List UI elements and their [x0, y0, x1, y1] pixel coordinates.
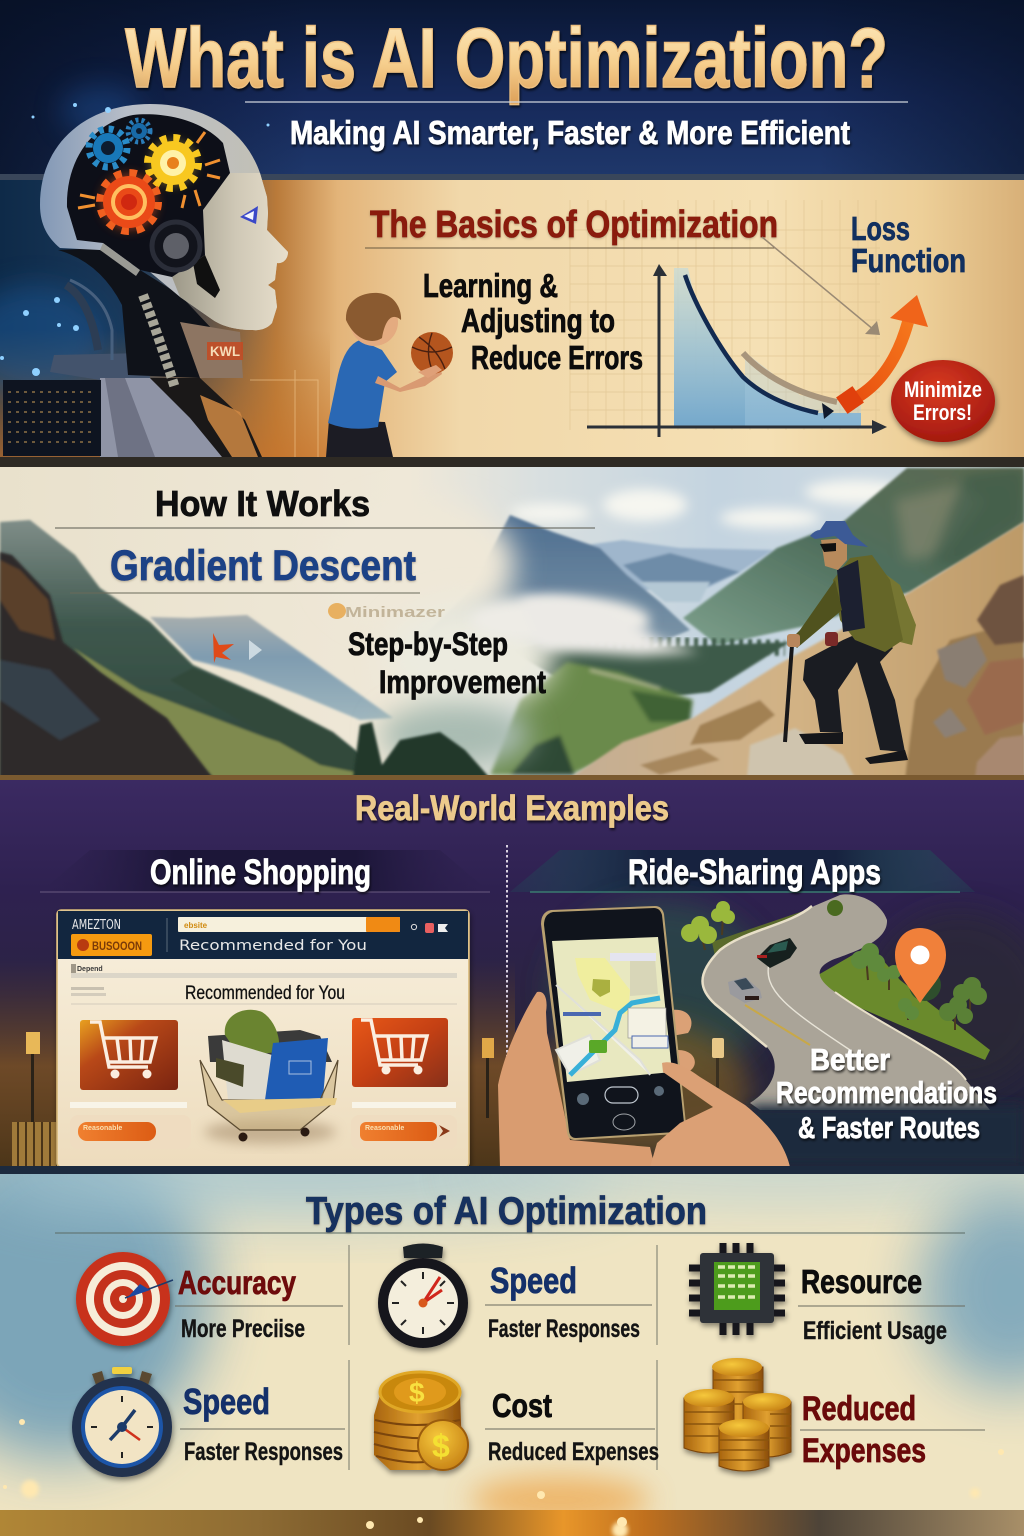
walking stick	[785, 645, 792, 742]
eye	[240, 206, 258, 224]
caption: better routes	[776, 1042, 997, 1145]
rocks	[747, 575, 1024, 778]
gear: yellow	[148, 138, 198, 188]
backpack	[880, 570, 916, 645]
badge: minimize errors: Minimize	[904, 377, 982, 402]
badge: minimize errors	[891, 360, 995, 442]
text: learning	[423, 267, 643, 376]
gear: blue small	[128, 120, 150, 142]
lamp	[712, 1038, 724, 1058]
illustration: child with ball	[326, 293, 453, 457]
valley mist	[385, 600, 555, 710]
trousers	[803, 628, 905, 752]
item: cost: Cost	[492, 1387, 552, 1424]
road	[702, 894, 990, 1110]
map screen	[552, 937, 672, 1082]
ridge fade	[440, 516, 534, 622]
caption smudge: Minimazer	[345, 604, 445, 621]
item: speed top: Speed	[490, 1260, 577, 1301]
page header: AMEZTON	[72, 918, 121, 933]
car: dark	[757, 938, 797, 968]
item: speed top	[378, 1244, 652, 1348]
caption: better routes: Better	[810, 1042, 890, 1077]
head	[821, 538, 847, 570]
item: reduced expenses	[684, 1358, 985, 1471]
grass	[818, 945, 990, 1060]
icon: map pin	[895, 928, 946, 1003]
text: learning: Reduce Errors	[471, 339, 643, 376]
text: step by step	[348, 626, 546, 700]
cheek panel	[193, 255, 220, 298]
item: speed top: Faster Responses	[488, 1315, 640, 1343]
jacket	[833, 555, 903, 652]
item: speed bottom: Speed	[183, 1381, 270, 1422]
shopping basket	[200, 1010, 338, 1144]
icon: chip	[689, 1243, 785, 1335]
badge: minimize errors: Errors!	[913, 400, 972, 425]
panel: the basics of optimization	[0, 85, 1024, 459]
ear ring	[152, 222, 200, 270]
data points	[0, 103, 270, 376]
ribbon: ride sharing apps	[510, 850, 975, 892]
icon: coin stack: $	[409, 1377, 425, 1408]
icon: coin piles	[684, 1358, 791, 1471]
tree line	[510, 640, 790, 700]
panel: real-world examples	[0, 780, 1024, 1172]
sparks	[78, 132, 220, 208]
boots	[799, 732, 908, 764]
left hand	[498, 992, 655, 1168]
hiker	[785, 521, 916, 764]
heading: gradient descent: Gradient Descent	[110, 542, 416, 590]
item: reduced expenses: Reduced	[802, 1390, 916, 1428]
caption smudge	[328, 603, 445, 621]
distant mountains	[472, 467, 1024, 646]
page header: BUSOOON	[92, 939, 142, 953]
label: loss function: Loss	[851, 210, 910, 247]
text: learning: Adjusting to	[461, 302, 615, 339]
trees	[681, 900, 987, 1030]
item: accuracy: More Preciise	[181, 1315, 305, 1343]
icon: target	[76, 1252, 173, 1346]
text: learning: Learning &	[423, 267, 558, 304]
ribbon: online shopping: Online Shopping	[150, 853, 371, 892]
panel: how it works	[0, 457, 1024, 781]
face	[172, 173, 288, 330]
server building	[3, 380, 101, 456]
item: accuracy: Accuracy	[178, 1264, 297, 1301]
clouds	[510, 480, 905, 528]
chart: loss curve	[587, 237, 928, 437]
street lamps	[12, 1032, 494, 1168]
ribbon: online shopping	[40, 850, 490, 892]
product row left	[70, 1102, 191, 1149]
ride sharing scene	[498, 894, 1024, 1168]
shade under caption	[750, 1105, 1024, 1166]
subtitle: Making AI Smarter, Faster & More Efficient	[290, 114, 850, 151]
item: resource	[689, 1243, 965, 1345]
dark rock	[0, 552, 213, 778]
text: step by step: Improvement	[379, 664, 546, 700]
panel: header	[0, 0, 1024, 180]
gear: orange	[100, 173, 158, 231]
car: silver	[728, 977, 762, 1003]
icon: robot head with gears	[40, 85, 288, 457]
heading: The Basics of Optimization	[370, 204, 778, 246]
panel: types of AI optimization	[0, 1166, 1024, 1536]
page header: Recommended for You	[179, 938, 367, 954]
icon: coin stack	[374, 1372, 468, 1470]
heading: Real-World Examples	[355, 789, 669, 828]
product row left: Reasonable	[83, 1125, 122, 1132]
pointer line	[762, 237, 874, 330]
label: loss function: Function	[851, 242, 966, 279]
label: loss function	[851, 210, 966, 279]
product row right	[351, 1102, 457, 1149]
brain cavity	[67, 114, 230, 277]
left mountains	[0, 520, 393, 778]
skull shell	[40, 104, 288, 330]
background tint	[0, 1174, 1024, 1525]
nav lines	[71, 964, 76, 974]
icon: robot head with gears: KWL	[210, 343, 240, 359]
item: accuracy	[76, 1252, 343, 1346]
icon: stopwatch	[378, 1244, 468, 1348]
right slope	[570, 522, 1024, 778]
product row right: Reasonable	[365, 1125, 404, 1132]
mock shopping page: Depend	[77, 966, 103, 973]
tile: cart right	[352, 1018, 448, 1087]
page header: ebsite	[184, 921, 208, 930]
foreground trees	[353, 722, 490, 778]
fire strip	[0, 1510, 1024, 1536]
orange circuit lines	[250, 370, 318, 457]
ribbon: ride sharing apps: Ride-Sharing Apps	[628, 853, 881, 892]
gear: blue large	[89, 129, 127, 167]
item: resource: Efficient Usage	[803, 1317, 947, 1345]
page header	[58, 911, 468, 959]
item: cost: Reduced Expenses	[488, 1438, 659, 1466]
tile: cart left	[80, 1020, 178, 1090]
robot shoulders	[50, 353, 150, 380]
heading: how it works: How It Works	[155, 483, 370, 524]
mock shopping page	[57, 910, 469, 1167]
item: speed bottom	[72, 1367, 345, 1477]
landscape	[0, 468, 1024, 778]
item: speed bottom: Faster Responses	[184, 1438, 343, 1466]
phone	[541, 906, 686, 1140]
icon: coin stack: $	[432, 1428, 450, 1464]
item: reduced expenses: Expenses	[802, 1432, 926, 1470]
item: cost	[374, 1372, 659, 1470]
icon: blue stopwatch	[72, 1367, 172, 1477]
robot neck	[58, 248, 213, 378]
meadow	[490, 662, 693, 775]
heading: Types of AI Optimization	[306, 1190, 707, 1233]
mock shopping page: Recommended for You	[185, 983, 345, 1004]
right hand	[650, 1062, 790, 1167]
text: step by step: Step-by-Step	[348, 626, 508, 662]
marker arrow	[213, 633, 262, 663]
basketball	[411, 332, 453, 374]
orange arrow	[854, 322, 908, 399]
item: resource: Resource	[801, 1263, 922, 1300]
